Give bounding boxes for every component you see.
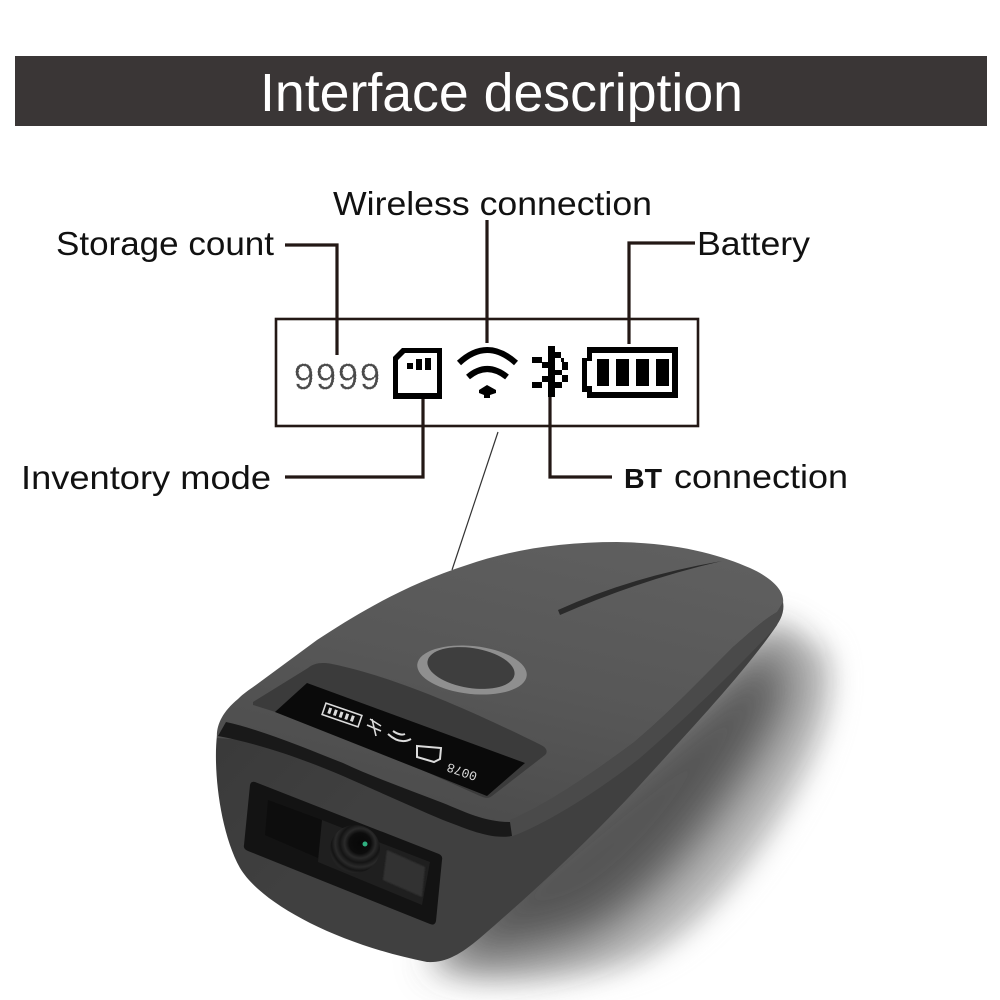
device shadow [430,620,831,980]
title banner [15,56,987,126]
pointer line from display to device [452,432,498,570]
mini card [417,746,441,762]
display bezel [253,663,547,798]
display panel outline [276,319,698,426]
right sensor module [383,850,425,897]
icon: bluetooth [532,346,568,397]
green indicator [362,842,368,846]
scan window left block [265,800,322,858]
label: BT connection: connection [674,458,848,495]
indicator slot [558,561,722,615]
icon: battery [582,347,678,398]
display readout: 9999: 9999 [293,358,381,401]
mini bluetooth [367,719,381,736]
label: Wireless connection: Wireless connection [333,185,652,222]
power button ring [415,640,529,700]
label: Storage count: Storage count [56,225,274,262]
power button [424,641,518,695]
label: BT connection: BT [624,463,662,494]
title banner: Interface description [260,63,743,123]
mini count: 0078 [445,759,479,783]
camera lens [330,825,380,873]
display glass [275,683,525,796]
icon: wifi signal [459,350,516,398]
scanner lower body [216,600,783,962]
scan window [244,782,442,925]
mini wifi [388,731,411,741]
sensor area [318,820,430,905]
side rim highlight [510,602,783,837]
front rim band [218,722,512,837]
barcode scanner device [216,542,783,962]
mini display readout [322,703,479,783]
scanner top face [217,542,783,830]
label: Battery: Battery [697,225,811,262]
label: Inventory mode: Inventory mode [21,459,271,496]
icon: SD card inventory mode [393,348,442,399]
leader lines [285,220,695,477]
mini battery [322,703,362,727]
